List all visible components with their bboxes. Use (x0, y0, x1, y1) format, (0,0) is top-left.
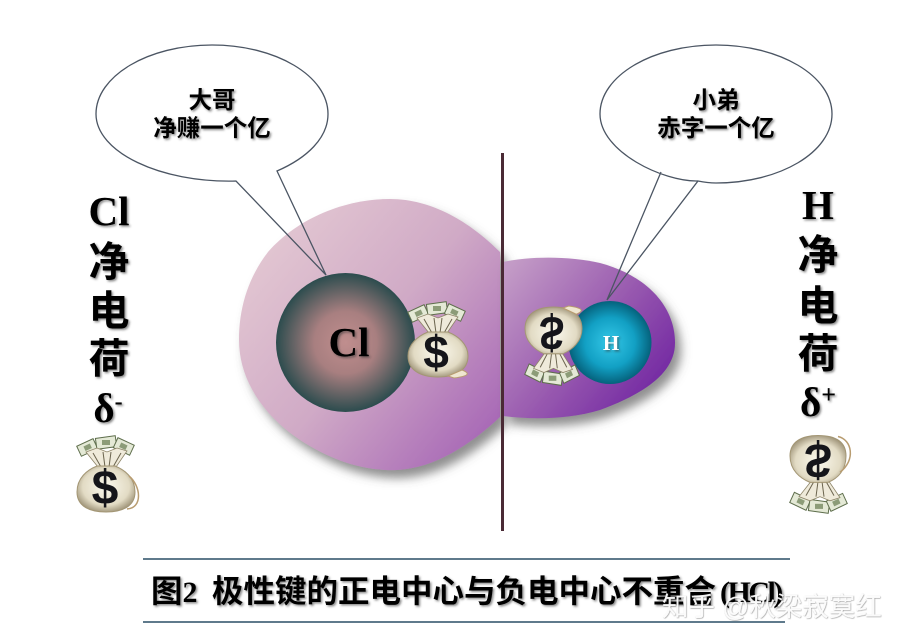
right column label: H net charge: 电 (798, 283, 838, 329)
money bag: right column: $ (805, 433, 831, 487)
money bag: left column: $ (92, 462, 119, 515)
money bag: left column (77, 436, 138, 515)
bubble text: Cl: 大哥 (188, 87, 236, 113)
speech bubble: H (600, 45, 832, 300)
watermark: 知乎 @秋梁寂寞红 (662, 592, 882, 622)
Cl atom (276, 273, 415, 412)
left column label: Cl net charge: - (115, 389, 123, 415)
caption: 极性键的正电中心与负电中心不重合 (212, 573, 716, 609)
bubble text: Cl (153, 87, 271, 141)
money bag on H atom (525, 306, 582, 385)
speech bubble: Cl (96, 45, 328, 275)
left column label: Cl net charge: Cl (88, 188, 130, 234)
right column label: H net charge: δ (800, 379, 821, 425)
electron cloud: Cl side (239, 199, 500, 470)
left column label: Cl net charge: 净 (88, 239, 130, 285)
bubble text: H (657, 87, 775, 141)
H atom label: H (603, 331, 619, 355)
bubble text: H: 赤字一个亿 (657, 115, 775, 141)
left column label: Cl net charge: δ (93, 385, 115, 431)
money bag: right column (790, 433, 850, 513)
caption: 图 (151, 573, 183, 609)
left column label: Cl net charge (88, 188, 130, 431)
electron cloud: H side (503, 258, 675, 418)
caption: (HCl) (720, 576, 782, 609)
right column label: H net charge: + (821, 380, 836, 409)
caption: 2 (183, 576, 198, 609)
money bag on H atom: $ (539, 306, 564, 359)
money bag on Cl atom: $ (423, 326, 449, 378)
bubble text: H: 小弟 (692, 87, 740, 113)
caption top rule (143, 558, 790, 560)
right column label: H net charge: H (802, 182, 834, 228)
right column label: H net charge: 荷 (798, 331, 838, 377)
H atom (568, 301, 652, 384)
right column label: H net charge (798, 182, 838, 425)
money bag on Cl atom (408, 302, 468, 378)
left column label: Cl net charge: 电 (88, 288, 130, 334)
Cl atom label: Cl (328, 319, 370, 365)
divider line (501, 153, 504, 531)
left column label: Cl net charge: 荷 (88, 336, 130, 382)
right column label: H net charge: 净 (798, 232, 838, 278)
caption bottom rule (143, 621, 785, 623)
bubble text: Cl: 净赚一个亿 (153, 115, 271, 141)
